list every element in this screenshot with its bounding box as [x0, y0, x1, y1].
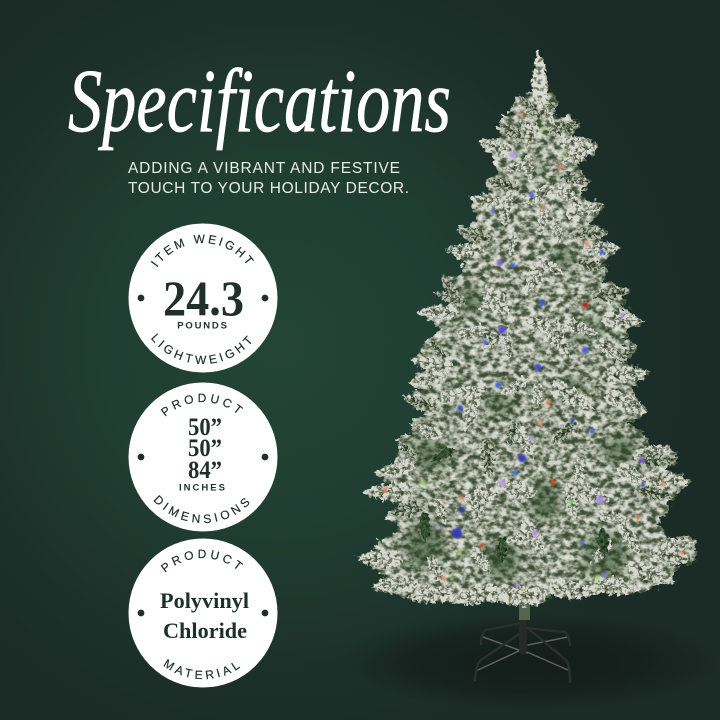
subtitle: TOUCH TO YOUR HOLIDAY DECOR.: [128, 180, 409, 197]
badge: item weight: 24.3: [163, 270, 244, 326]
fairy lights: [382, 113, 684, 588]
badge: product dimensions: PRODUCT: [160, 394, 244, 416]
branches: [356, 50, 699, 611]
badge: item weight: LIGHTWEIGHT: [151, 333, 252, 364]
badge: product dimensions: INCHES: [179, 482, 227, 494]
title: Specifications: [68, 52, 451, 151]
badge: product material: Chloride: [163, 618, 247, 643]
floor shadow: [340, 614, 720, 710]
outer branches: [356, 92, 699, 611]
inner branches: [419, 98, 654, 589]
tree stand: [475, 620, 570, 682]
badge: product material: [128, 538, 278, 688]
badge: product material: MATERIAL: [163, 659, 240, 680]
dark green pockets: [405, 162, 638, 580]
badge: product material: Polyvinyl: [160, 588, 249, 613]
tree silhouette: [357, 50, 697, 602]
badge: product dimensions: 50”: [188, 435, 222, 462]
tree: [356, 50, 699, 620]
subtitle: ADDING A VIBRANT AND FESTIVE: [128, 160, 400, 177]
badge: product material: PRODUCT: [160, 550, 244, 572]
badge: product dimensions: 50”: [188, 414, 222, 441]
badge: item weight: ITEM WEIGHT: [150, 234, 254, 267]
badge: product dimensions: DIMENSIONS: [154, 495, 250, 524]
badge: item weight: POUNDS: [177, 320, 229, 332]
subtitle: [128, 160, 409, 197]
top spire: [532, 50, 548, 104]
tree trunk: [519, 596, 530, 620]
badge: product dimensions: [128, 382, 278, 532]
badge: product dimensions: 84”: [188, 457, 222, 484]
badge: item weight: [128, 224, 278, 372]
